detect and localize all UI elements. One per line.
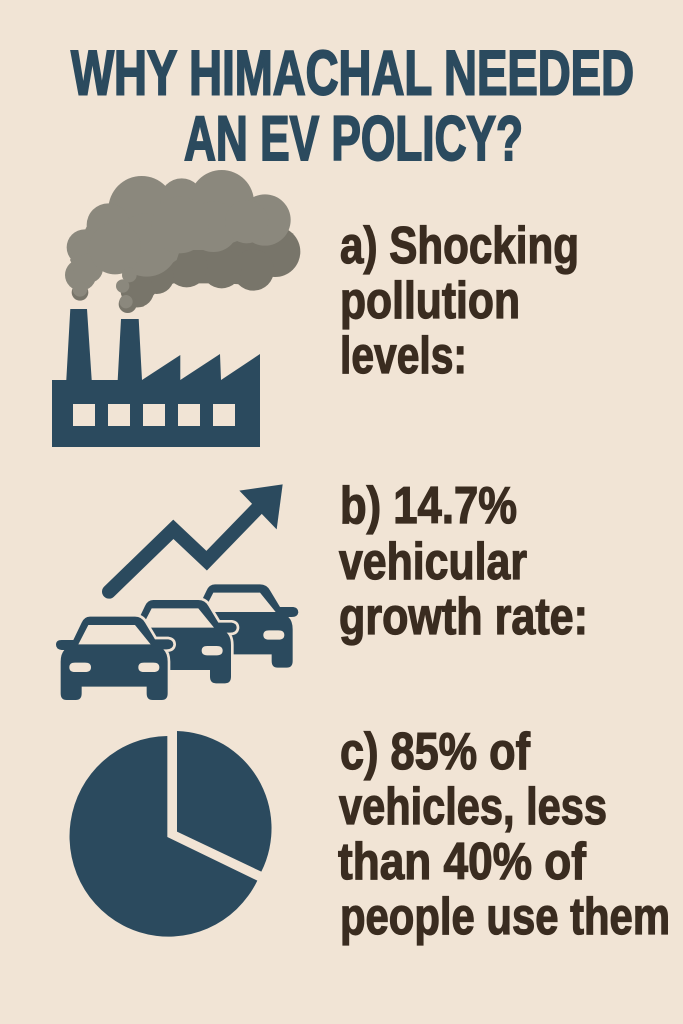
text: pollution levels (340, 217, 579, 385)
rising arrow (109, 484, 283, 592)
icon: rising arrow above three cars (56, 484, 298, 700)
text: pollution levels: pollution (340, 272, 520, 330)
factory building (52, 309, 260, 447)
text: pollution levels: a) Shocking (340, 217, 579, 275)
back car (181, 584, 298, 668)
text: vehicles versus people: c) 85% of (340, 723, 531, 781)
front car (56, 617, 173, 700)
text: vehicular growth rate: b) 14.7% (340, 477, 517, 535)
text: vehicular growth rate: growth rate: (339, 588, 588, 646)
text: vehicles versus people: than 40% of (338, 833, 587, 891)
pie chart (70, 731, 272, 937)
small slice (177, 731, 272, 872)
icon: factory with smoke (52, 170, 300, 447)
large slice (70, 736, 257, 937)
text: vehicles versus people (338, 723, 670, 946)
text: vehicles versus people: vehicles, less (339, 778, 607, 836)
smoke cloud (65, 170, 300, 313)
text: vehicular growth rate (339, 477, 588, 646)
text: pollution levels: levels: (340, 327, 467, 385)
title (71, 38, 634, 174)
text: vehicular growth rate: vehicular (339, 533, 527, 591)
middle car (119, 600, 237, 683)
title: AN EV POLICY? (184, 104, 523, 174)
